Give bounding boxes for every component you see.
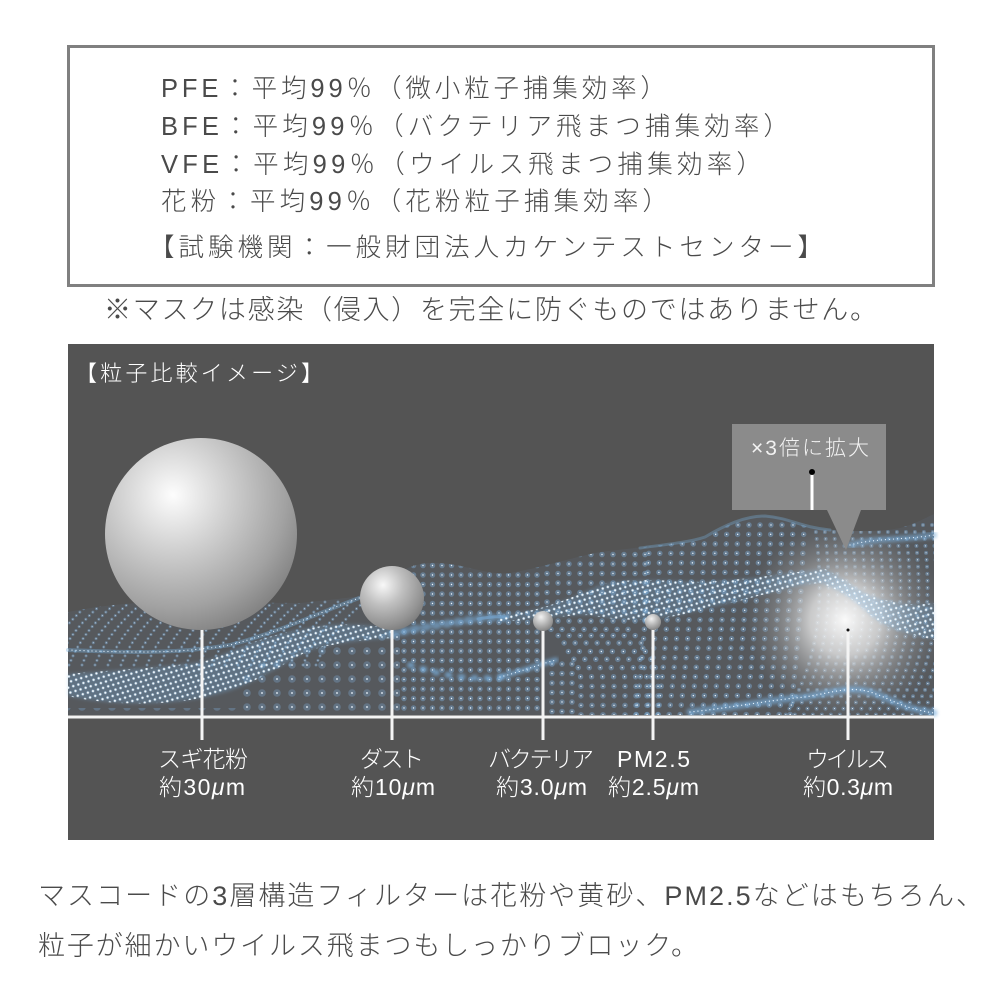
sphere: bacteria <box>533 611 553 740</box>
heading: 【粒子比較イメージ】 <box>75 361 323 386</box>
axis line <box>68 716 934 718</box>
text: testing body: 【試験機関：一般財団法人カケンテストセンター】 <box>149 234 823 262</box>
label: PM2.5 <box>608 746 699 800</box>
ridge: bottom right band <box>690 689 934 713</box>
label: bacteria: 約3.0μm <box>496 774 587 800</box>
text: pollen: 花粉：平均99％（花粉粒子捕集効率） <box>161 188 668 216</box>
label: bacteria <box>488 746 594 800</box>
panel: particle comparison <box>30 344 964 840</box>
label: cedar pollen: 約30μm <box>159 774 245 800</box>
label: cedar pollen <box>158 746 248 800</box>
label: dust: 約10μm <box>351 774 435 800</box>
chart: particle wave mesh <box>30 510 964 716</box>
label: bacteria: バクテリア <box>488 746 594 772</box>
label: virus: 約0.3μm <box>803 774 893 800</box>
ridge: top right band <box>640 516 934 548</box>
text: PFE: PFE：平均99％（微小粒子捕集効率） <box>161 75 666 103</box>
panel: filtration efficiency box <box>68 46 934 286</box>
sphere: cedar pollen <box>105 438 297 740</box>
text: bottom description: マスコードの3層構造フィルターは花粉や黄砂、PM2.5などはもちろん、 <box>38 881 983 911</box>
ridge: upper left strand <box>68 597 362 652</box>
sphere: PM2.5 <box>645 614 661 740</box>
callout: 3x magnification <box>732 424 886 550</box>
text: VFE: VFE：平均99％（ウイルス飛まつ捕集効率） <box>161 151 762 179</box>
callout virus sample <box>809 469 815 510</box>
ridge: lower dust strand <box>410 665 510 678</box>
label: dust <box>351 746 435 800</box>
ridge: centre band <box>500 569 934 640</box>
label: PM2.5: 約2.5μm <box>608 774 699 800</box>
sphere: dust <box>360 566 424 740</box>
callout text: ×3倍に拡大 <box>751 437 869 460</box>
text: BFE: BFE：平均99％（バクテリア飛まつ捕集効率） <box>161 113 789 141</box>
marker: virus <box>846 628 850 740</box>
ridge: short strand <box>500 660 556 677</box>
ridge: left twisted band <box>68 625 392 704</box>
ridge: dust band <box>392 617 510 634</box>
text: bottom description <box>38 881 983 961</box>
label: PM2.5: PM2.5 <box>617 746 690 772</box>
label: cedar pollen: スギ花粉 <box>158 746 248 772</box>
text: bottom description: 粒子が細かいウイルス飛まつもしっかりブロック。 <box>38 931 698 961</box>
label: virus: ウイルス <box>806 746 889 772</box>
text: disclaimer note: ※マスクは感染（侵入）を完全に防ぐものではありません。 <box>104 295 877 325</box>
label: dust: ダスト <box>360 746 424 772</box>
label: virus <box>803 746 893 800</box>
